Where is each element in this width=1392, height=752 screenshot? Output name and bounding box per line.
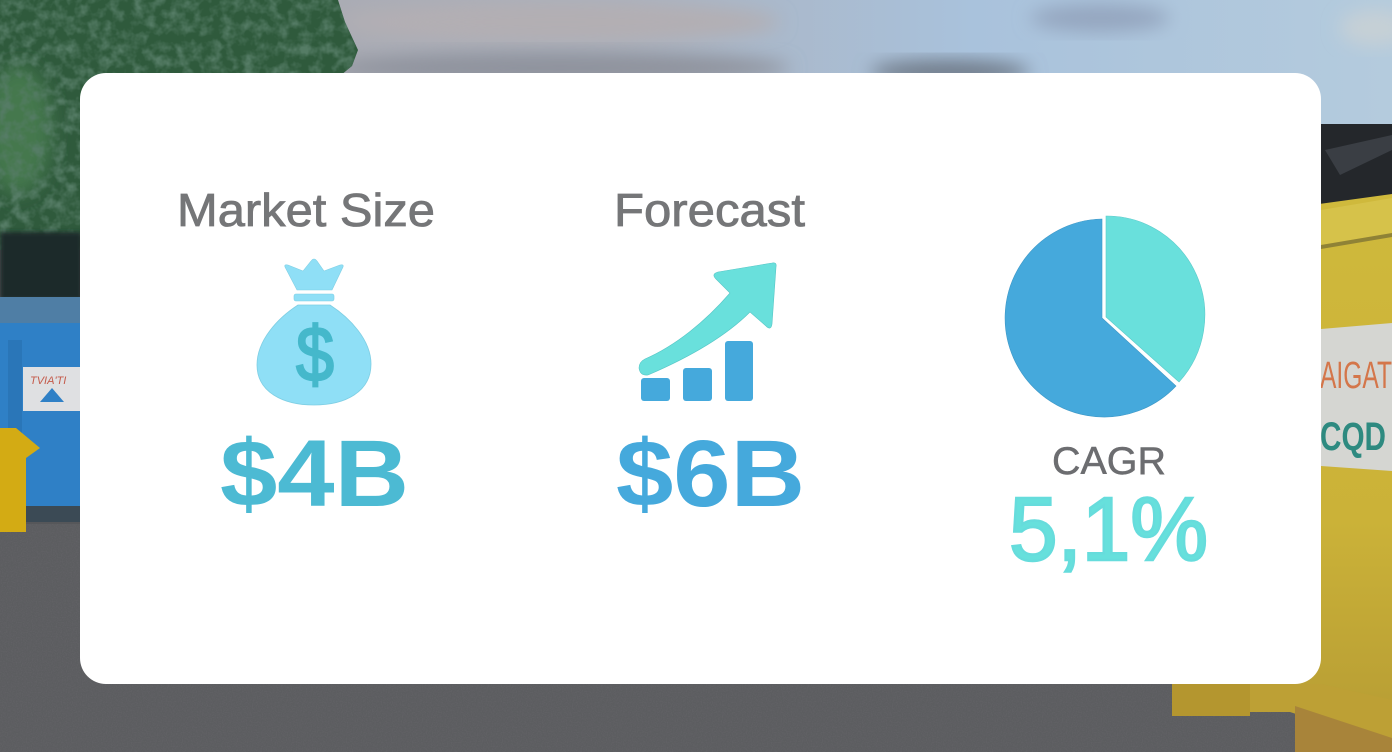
heading: Market Size: Market Size bbox=[177, 184, 435, 236]
background photo: tarp on right bbox=[1290, 124, 1392, 208]
icon: growth arrow and bars bbox=[639, 263, 776, 401]
background photo: yellow skip bbox=[1172, 194, 1392, 752]
background photo: tree bbox=[0, 0, 360, 250]
icon: money bag: $ bbox=[296, 310, 334, 398]
value: $4B: $4B bbox=[220, 421, 409, 527]
sign on blue container: TVIA'TI bbox=[30, 375, 66, 387]
white card panel bbox=[80, 73, 1321, 684]
column: forecast bbox=[614, 184, 805, 527]
icon: money bag bbox=[257, 259, 371, 405]
pie chart bbox=[1005, 216, 1205, 417]
column: market size bbox=[177, 184, 435, 527]
background photo: blue container bbox=[0, 297, 82, 522]
label: CAGR: CAGR bbox=[1052, 440, 1166, 483]
sign on yellow skip bbox=[1320, 323, 1392, 471]
value: 5,1%: 5,1% bbox=[1009, 480, 1208, 580]
heading: Forecast: Forecast bbox=[614, 184, 805, 236]
value: $6B: $6B bbox=[616, 421, 805, 527]
sign on blue container bbox=[23, 367, 81, 411]
column: CAGR bbox=[1005, 216, 1208, 580]
background photo: sky bbox=[0, 0, 1392, 130]
background photo: left dark hedge bbox=[0, 232, 82, 300]
background photo: asphalt bbox=[0, 524, 1392, 752]
background photo: yellow bin bbox=[0, 428, 40, 532]
